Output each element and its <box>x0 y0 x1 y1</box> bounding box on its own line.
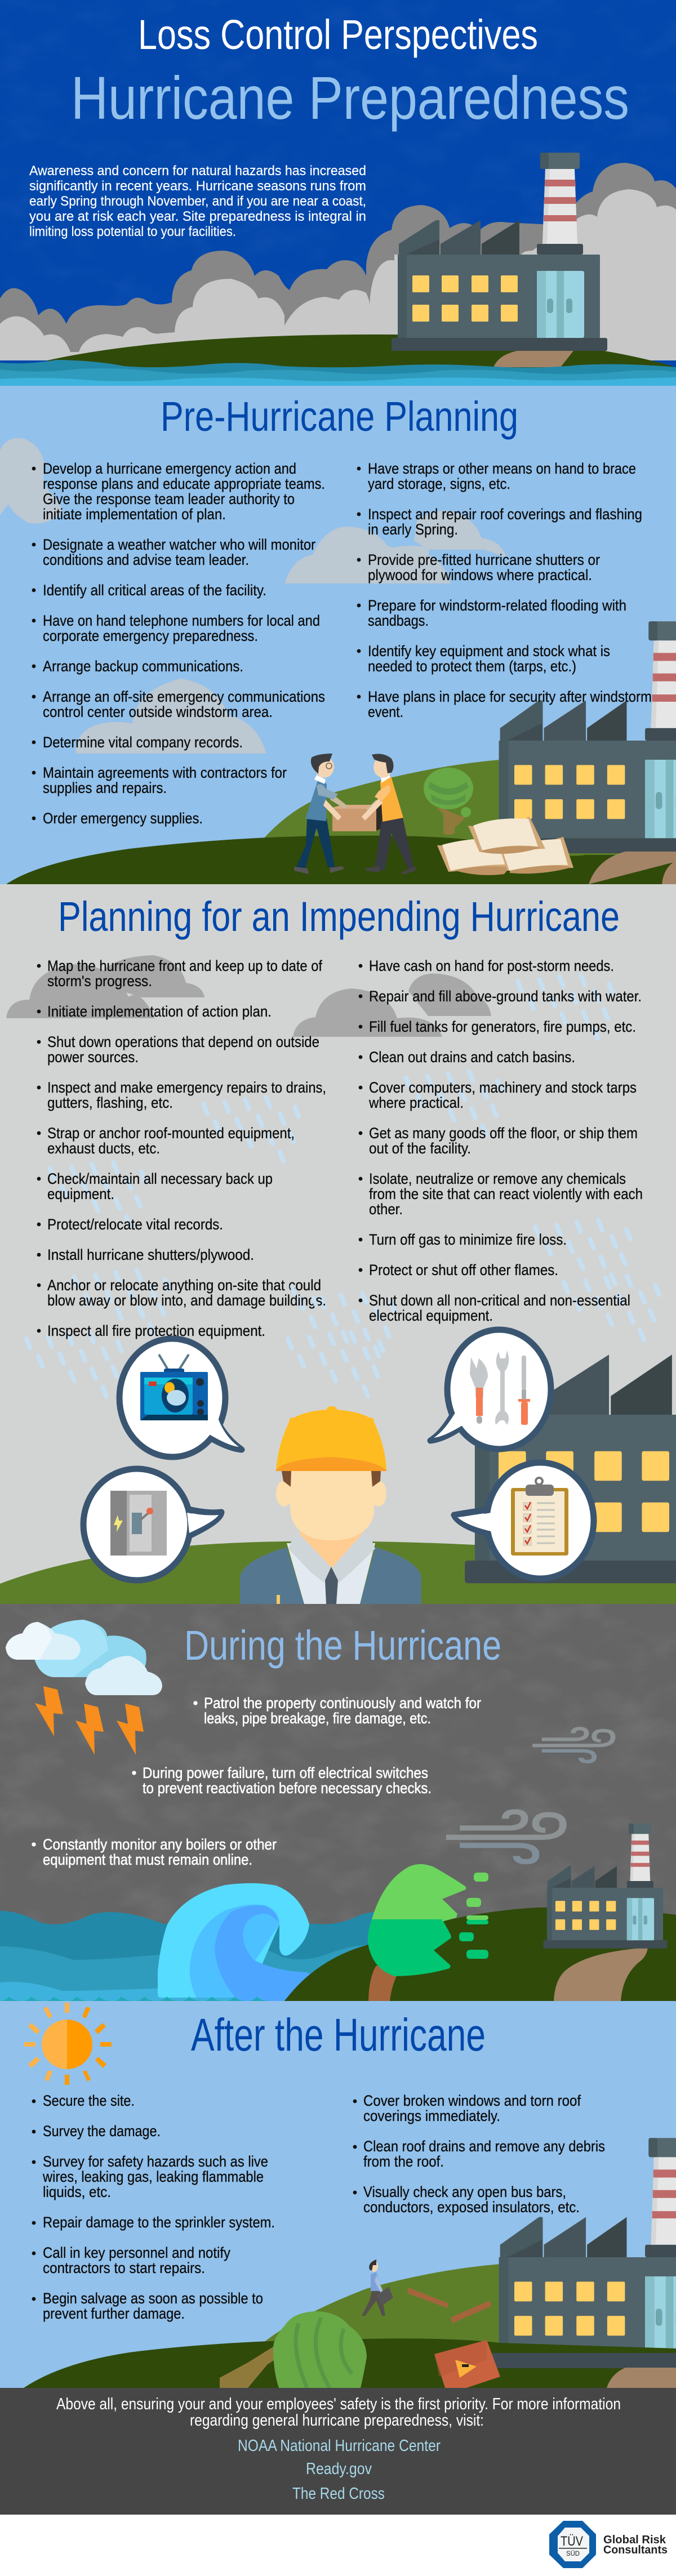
pre-hurricane factory <box>492 621 676 853</box>
list: pre-hurricane right column: event. <box>368 703 403 720</box>
list: during, item 2: to prevent reactivation before necessary checks. <box>143 1780 432 1797</box>
panel: footer <box>0 2388 676 2515</box>
bullets: after left <box>32 2100 35 2301</box>
list: impending left column: Inspect all fire protection equipment. <box>47 1322 265 1339</box>
list: after right column: Clean roof drains and remove any debris <box>363 2138 605 2155</box>
list: impending right column: other. <box>369 1201 403 1218</box>
list: pre-hurricane right column: in early Spring. <box>368 521 458 538</box>
logo text: Consultants <box>603 2544 668 2556</box>
bubble: tools <box>430 1330 551 1449</box>
list: pre-hurricane left column: Designate a weather watcher who will monitor <box>43 536 315 553</box>
bubble: tv weather <box>119 1339 242 1457</box>
header hill <box>47 335 673 372</box>
engineer figure <box>240 1406 421 1604</box>
list: impending right column: Protect or shut off other flames. <box>369 1262 558 1278</box>
list: pre-hurricane left column: Identify all critical areas of the facility. <box>43 582 266 599</box>
list: after left column: Secure the site. <box>43 2092 135 2109</box>
list: pre-hurricane right column: Identify key equipment and stock what is <box>368 643 610 659</box>
intro paragraph: limiting loss potential to your facilities. <box>29 224 236 239</box>
after path <box>607 2368 676 2388</box>
man in orange shirt <box>362 754 416 875</box>
intro paragraph: significantly in recent years. Hurricane seasons runs from <box>29 179 366 194</box>
bush <box>273 2311 367 2388</box>
wind small <box>532 1728 613 1762</box>
list: during, item 1: leaks, pipe breakage, fire damage, etc. <box>204 1710 431 1727</box>
list: during, item 3: equipment that must remain online. <box>43 1851 252 1868</box>
intro paragraph: Awareness and concern for natural hazards has increased <box>29 163 366 179</box>
front hill <box>6 836 676 884</box>
tools icon <box>470 1351 530 1425</box>
list: pre-hurricane left column: Arrange an off-site emergency communications <box>43 688 325 705</box>
list: pre-hurricane left column: initiate implementation of plan. <box>43 506 226 523</box>
list: pre-hurricane left column: Maintain agreements with contractors for <box>43 764 287 781</box>
list: impending right column: out of the facility. <box>369 1140 471 1157</box>
box <box>332 804 383 831</box>
list: impending right column: Turn off gas to minimize fire loss. <box>369 1231 567 1248</box>
impending factory <box>465 1236 676 1583</box>
broken planks <box>407 2288 491 2323</box>
list: during, item 2: During power failure, turn off electrical switches <box>143 1764 428 1781</box>
list: after right column: from the roof. <box>363 2153 444 2170</box>
heading: Pre-Hurricane Planning: Pre-Hurricane Planning <box>161 393 518 440</box>
tree <box>424 768 473 835</box>
list: impending right column: Repair and fill above-ground tanks with water. <box>369 988 642 1005</box>
storm cloud icon <box>6 1620 162 1695</box>
list: pre-hurricane right column <box>368 460 652 720</box>
list: impending right column: Cover computers, machinery and stock tarps <box>369 1079 637 1096</box>
list: pre-hurricane left column: Order emergency supplies. <box>43 810 203 827</box>
list: pre-hurricane right column: Have straps or other means on hand to brace <box>368 460 636 477</box>
sideburns <box>282 1471 381 1487</box>
list: after left column: contractors to start repairs. <box>43 2259 205 2276</box>
flying leaves <box>459 1873 488 1959</box>
dark texture <box>0 1604 676 2001</box>
list: during, item 1 <box>194 1695 481 1727</box>
list: after left column <box>42 2092 275 2322</box>
panel: pre-hurricane planning background <box>0 386 676 884</box>
people carrying a box <box>294 754 416 875</box>
list: pre-hurricane left column <box>43 460 325 827</box>
after factory <box>492 2138 676 2370</box>
list: pre-hurricane left column: corporate emergency preparedness. <box>43 627 258 644</box>
heading: Loss Control Perspectives: Loss Control Perspectives <box>138 11 538 58</box>
list: after left column: Begin salvage as soon as possible to <box>43 2290 263 2307</box>
list: impending right column: Clean out drains and catch basins. <box>369 1049 575 1066</box>
list: after right column: coverings immediately. <box>363 2107 500 2124</box>
list: after left column: Repair damage to the sprinkler system. <box>43 2214 275 2231</box>
list: during, item 3 <box>32 1836 277 1868</box>
list: impending right column: electrical equipment. <box>369 1307 493 1324</box>
list: after left column: prevent further damage. <box>43 2305 185 2322</box>
list: impending left column: blow away or blow into, and damage buildings. <box>47 1292 326 1309</box>
list: impending right column: Fill fuel tanks for generators, fire pumps, etc. <box>369 1018 636 1035</box>
pen <box>277 1595 280 1604</box>
crashing wave <box>158 1883 315 2001</box>
pre-hurricane clouds <box>0 438 506 754</box>
base overlay of factory <box>492 2353 676 2368</box>
during path <box>554 1947 648 2001</box>
bubble: checklist <box>454 1463 594 1579</box>
warning sign <box>434 2340 500 2388</box>
header waves <box>0 360 676 386</box>
list: impending right column: Have cash on hand for post-storm needs. <box>369 957 614 974</box>
list: impending left column: Map the hurricane front and keep up to date of <box>47 957 322 974</box>
list: pre-hurricane left column: control center outside windstorm area. <box>43 703 273 720</box>
list: pre-hurricane left column: Have on hand telephone numbers for local and <box>43 612 320 629</box>
header clouds <box>0 163 676 360</box>
bullets: impending right <box>359 964 362 1302</box>
logo text: Global Risk <box>603 2534 666 2546</box>
during factory <box>544 1824 668 1949</box>
suit <box>240 1547 421 1604</box>
helmet brim <box>275 1457 387 1471</box>
after hill front <box>24 2338 676 2388</box>
panel: impending hurricane background <box>0 884 676 1604</box>
rain drops over text <box>292 1286 316 1305</box>
list: impending right column: where practical. <box>368 1094 464 1111</box>
list: pre-hurricane right column: Inspect and repair roof coverings and flashing <box>368 506 642 523</box>
header path <box>493 351 573 367</box>
list: after right column <box>363 2092 605 2216</box>
list: after left column: Call in key personnel and notify <box>43 2244 230 2261</box>
list: pre-hurricane right column: Provide pre-fitted hurricane shutters or <box>368 551 600 568</box>
intro paragraph: you are at risk each year. Site preparedness is integral in <box>29 209 366 224</box>
man in blue shirt <box>294 754 348 874</box>
list: after right column: Visually check any open bus bars, <box>363 2183 566 2200</box>
sandbags <box>437 817 573 875</box>
link: The Red Cross: The Red Cross <box>292 2485 385 2503</box>
list: pre-hurricane right column: needed to protect them (tarps, etc.) <box>368 658 576 675</box>
brown path <box>589 852 676 884</box>
list: after left column: Survey for safety hazards such as live <box>43 2153 268 2170</box>
bullets: after right <box>353 2100 357 2194</box>
sky texture <box>0 0 676 360</box>
bullets: pre-hurricane right <box>357 467 361 698</box>
list: pre-hurricane left column: response plans and educate appropriate teams. <box>43 475 325 492</box>
list: during, item 1: Patrol the property continuously and watch for <box>204 1695 481 1712</box>
list: impending left column: storm's progress. <box>47 973 152 990</box>
logo: TUV SUD: TÜV <box>561 2534 583 2549</box>
footer message <box>56 2395 621 2430</box>
list: impending left column: Protect/relocate vital records. <box>47 1216 223 1233</box>
list: during, item 2 <box>132 1764 432 1797</box>
list: pre-hurricane left column: Give the response team leader authority to <box>43 491 295 507</box>
impending hill <box>0 1541 676 1604</box>
bullets: impending left <box>37 964 41 1332</box>
face <box>287 1471 375 1540</box>
list: impending left column: gutters, flashing, etc. <box>47 1094 173 1111</box>
footer message: regarding general hurricane preparedness, visit: <box>190 2412 484 2430</box>
fallen tree trunk <box>220 2346 275 2388</box>
list: pre-hurricane right column: plywood for windows where practical. <box>368 567 592 583</box>
neck <box>300 1521 363 1568</box>
bullets: pre-hurricane left <box>32 467 35 820</box>
list: impending left column: Check/maintain all necessary back up <box>47 1170 273 1187</box>
heading: After the Hurricane: After the Hurricane <box>191 2009 486 2061</box>
intro paragraph <box>29 163 366 239</box>
list: pre-hurricane left column: supplies and repairs. <box>43 779 167 796</box>
panel: logo strip <box>0 2515 676 2576</box>
tv icon <box>140 1354 208 1420</box>
list: impending left column: Anchor or relocate anything on-site that could <box>47 1277 321 1294</box>
helmet <box>276 1406 386 1471</box>
list: impending right column: Get as many goods off the floor, or ship them <box>369 1125 638 1142</box>
heading: During the Hurricane: During the Hurricane <box>184 1622 501 1669</box>
wind large <box>446 1812 563 1862</box>
list: after left column: wires, leaking gas, leaking flammable <box>42 2168 264 2185</box>
collar <box>288 1532 375 1583</box>
logo: TUV SUD: SÜD <box>566 2550 580 2557</box>
after hill back <box>263 2264 676 2365</box>
during hill <box>284 1908 676 2001</box>
list: impending left column: Shut down operations that depend on outside <box>47 1033 319 1050</box>
list: impending left column: Install hurricane shutters/plywood. <box>47 1246 254 1263</box>
list: impending left column: Inspect and make emergency repairs to drains, <box>47 1079 326 1096</box>
list: impending right column: Shut down all non-critical and non-essential <box>369 1292 630 1309</box>
lightning bolts <box>35 1686 144 1755</box>
walking person with briefcase <box>362 2259 393 2316</box>
storm sea <box>0 1910 394 2001</box>
sun icon <box>24 2003 112 2085</box>
panel: after the hurricane background <box>0 2001 676 2388</box>
list: pre-hurricane left column: Develop a hurricane emergency action and <box>43 460 296 477</box>
list: after left column: liquids, etc. <box>43 2183 111 2200</box>
ears <box>276 1481 292 1507</box>
shirt <box>287 1543 375 1604</box>
link: NOAA: NOAA National Hurricane Center <box>238 2437 441 2455</box>
bent tree <box>368 1864 488 2001</box>
list: impending right column <box>368 957 643 1324</box>
list: impending left column: exhaust ducts, etc. <box>47 1140 160 1157</box>
list: impending right column: from the site that can react violently with each <box>369 1186 643 1202</box>
list: impending left column: power sources. <box>47 1049 139 1066</box>
list: impending left column <box>47 957 326 1339</box>
list: during, item 3: Constantly monitor any boilers or other <box>43 1836 277 1853</box>
wave foam scallops <box>0 1996 270 2001</box>
list: impending left column: equipment. <box>47 1186 114 1202</box>
logo: TUV SUD <box>549 2521 596 2568</box>
list: after right column: conductors, exposed insulators, etc. <box>363 2199 580 2216</box>
switch icon <box>110 1491 167 1556</box>
list: after left column: Survey the damage. <box>43 2123 161 2140</box>
back hill <box>263 760 676 856</box>
list: pre-hurricane left column: Determine vital company records. <box>43 734 243 751</box>
list: pre-hurricane right column: yard storage, signs, etc. <box>368 475 510 492</box>
tie <box>325 1567 338 1604</box>
list: pre-hurricane left column: conditions and advise team leader. <box>43 551 249 568</box>
storm clouds <box>6 955 491 1037</box>
link: Ready.gov: Ready.gov <box>306 2460 372 2478</box>
list: impending left column: Strap or anchor roof-mounted equipment, <box>47 1125 295 1142</box>
logo text <box>603 2534 668 2556</box>
list: impending left column: Initiate implementation of action plan. <box>47 1003 272 1020</box>
list: after right column: Cover broken windows and torn roof <box>363 2092 581 2109</box>
bubble: electrical switch <box>83 1469 221 1580</box>
intro paragraph: early Spring through November, and if you are near a coast, <box>29 194 366 209</box>
clipboard icon <box>511 1478 568 1556</box>
list: pre-hurricane right column: sandbags. <box>368 612 429 629</box>
list: pre-hurricane left column: Arrange backup communications. <box>43 658 243 675</box>
rain <box>26 975 659 1396</box>
panel: during the hurricane background <box>0 1604 676 2001</box>
list: impending right column: Isolate, neutralize or remove any chemicals <box>369 1170 626 1187</box>
list: pre-hurricane right column: Prepare for windstorm-related flooding with <box>368 597 626 614</box>
section background: header sky <box>0 0 676 386</box>
header factory <box>392 153 607 351</box>
